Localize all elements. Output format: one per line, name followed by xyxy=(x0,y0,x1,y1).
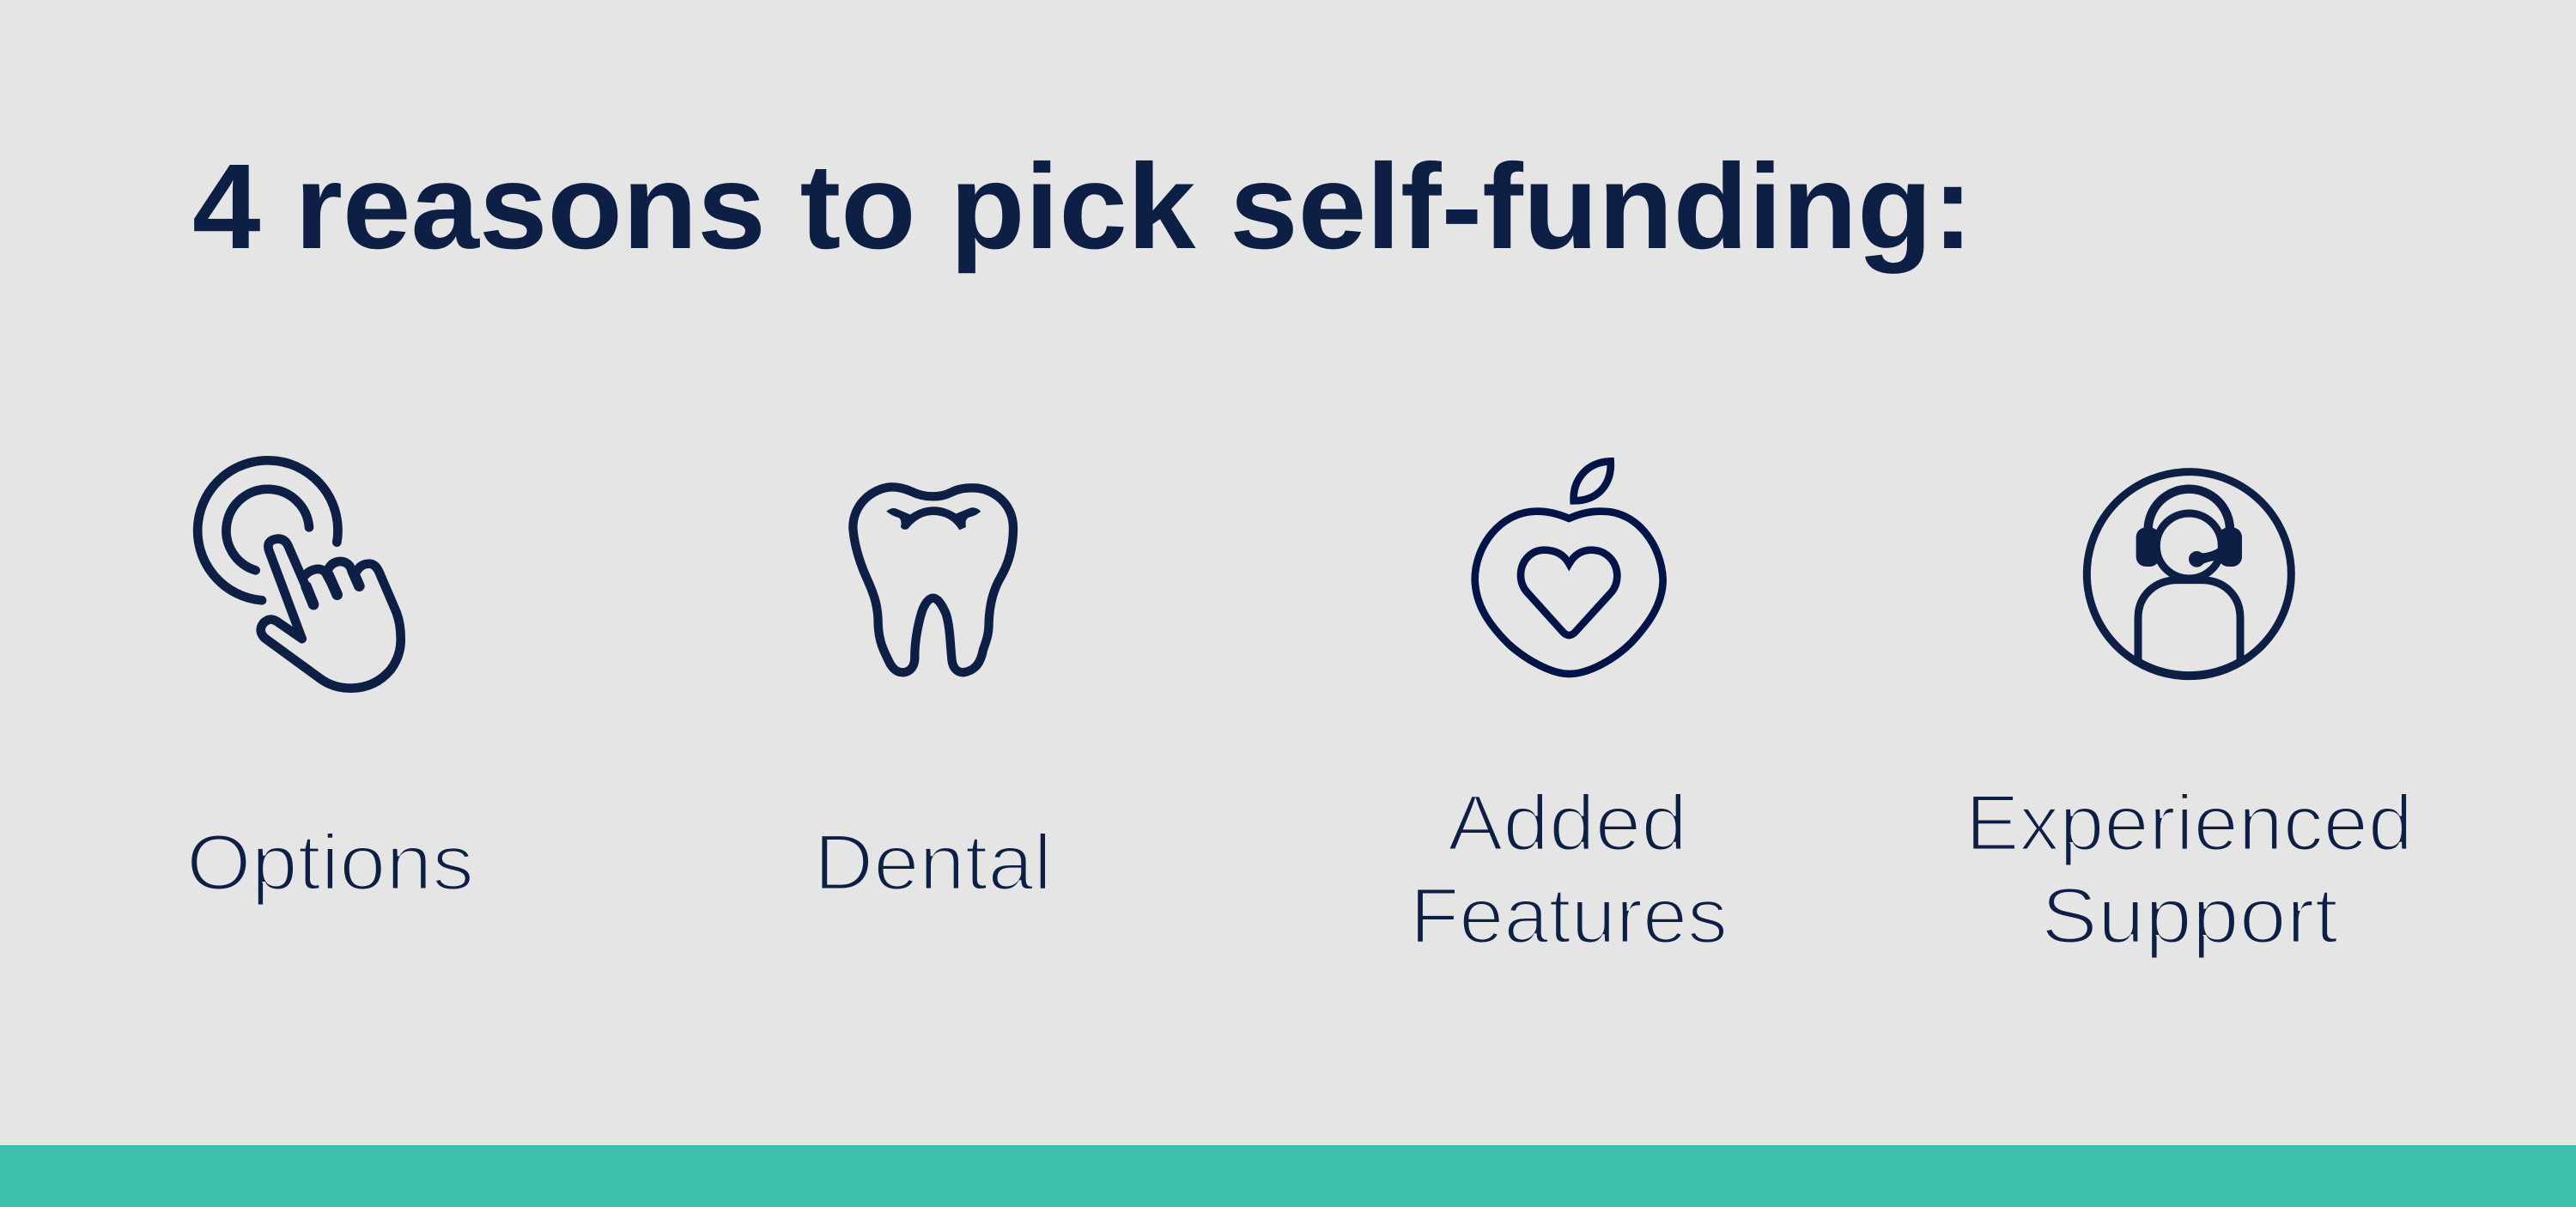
icon: apple with heart xyxy=(1475,461,1663,674)
reason 1: options xyxy=(186,460,474,907)
label: Added Features xyxy=(1410,779,1728,960)
label: Experienced Support: Experienced xyxy=(1965,779,2413,867)
label: Added Features: Added xyxy=(1448,779,1687,867)
title: 4 reasons to pick self-funding: xyxy=(192,138,1973,274)
reason 2: dental xyxy=(814,487,1052,907)
teal footer bar xyxy=(0,1145,2576,1207)
icon: tooth xyxy=(853,487,1013,672)
label: Dental: Dental xyxy=(814,819,1052,907)
label: Experienced Support xyxy=(1965,779,2413,960)
reason 4: experienced support xyxy=(1965,472,2413,960)
label: Experienced Support: Support xyxy=(2041,872,2338,960)
icon: hand tapping xyxy=(197,460,401,688)
label: Added Features: Features xyxy=(1410,872,1728,960)
reason 3: added features xyxy=(1410,461,1728,960)
label: Options: Options xyxy=(186,819,474,907)
icon: agent with headset xyxy=(2087,472,2291,676)
